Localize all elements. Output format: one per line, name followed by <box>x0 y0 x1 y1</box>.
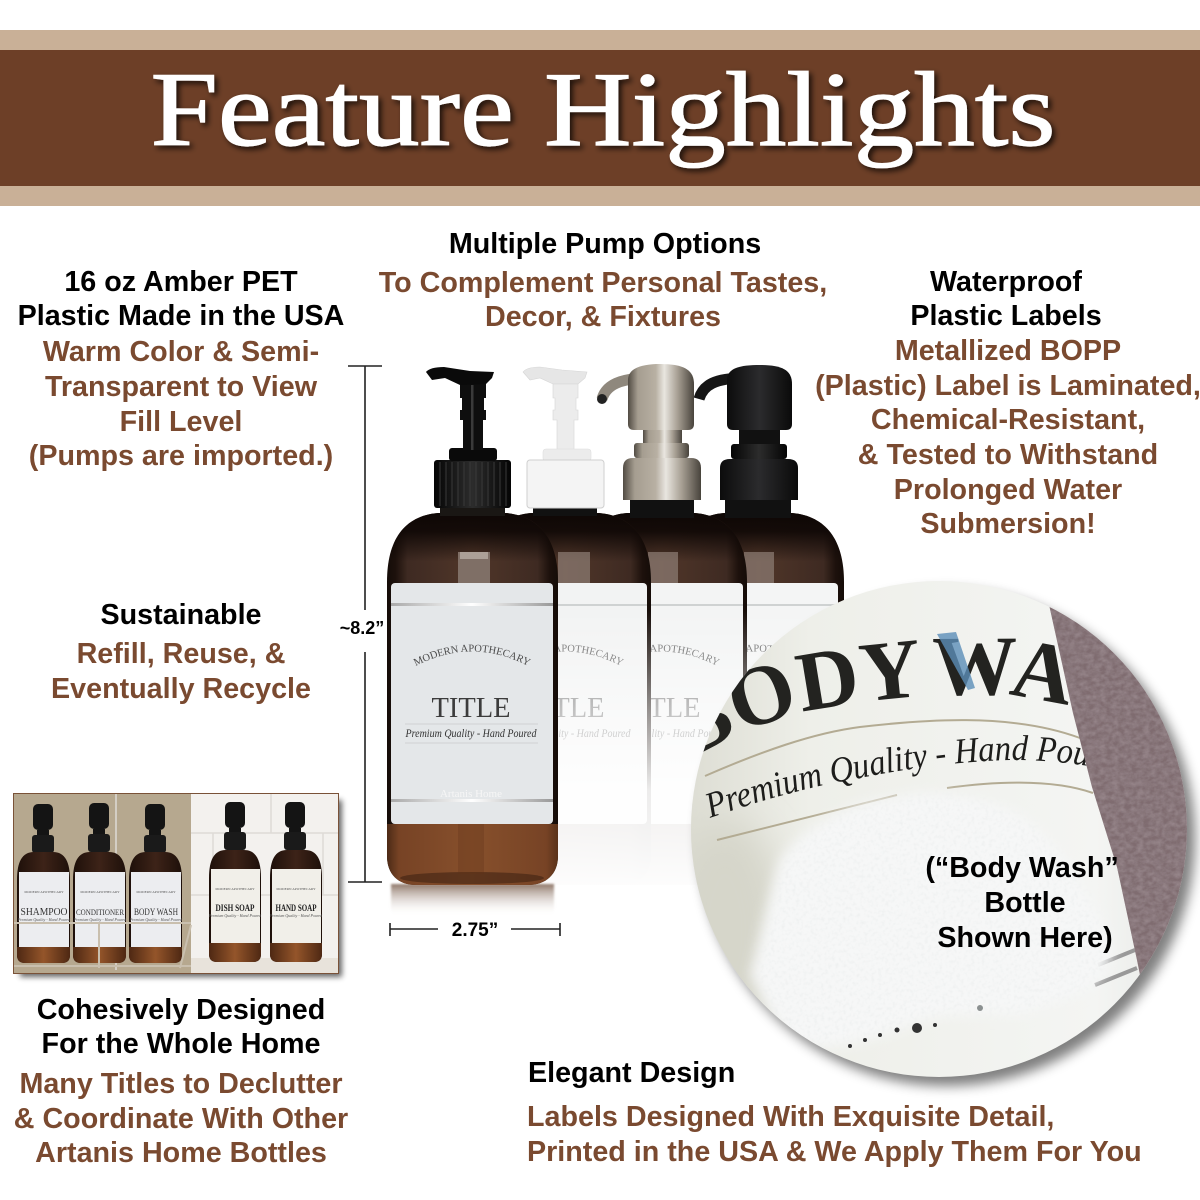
text block: amber PET: 16 oz Amber PET <box>64 266 298 298</box>
label: TITLE <box>432 692 510 724</box>
text block: waterproof labels: Waterproof <box>930 266 1082 298</box>
text block: elegant design: Printed in the USA & We Apply Them For You <box>527 1136 1142 1168</box>
text block: sustainable: Eventually Recycle <box>51 673 311 705</box>
text block: pump options: Decor, & Fixtures <box>485 301 721 333</box>
foil lines <box>705 720 1137 985</box>
bottle: white pump: Premium Quality - Hand Poured <box>499 726 631 740</box>
thumbnail bottles: SHAMPOO <box>20 907 68 918</box>
thumbnail bottles: MODERN APOTHECARY <box>136 890 176 894</box>
label <box>391 583 553 824</box>
text block: amber PET: Fill Level <box>120 406 242 438</box>
text block: cohesive design: Artanis Home Bottles <box>35 1137 327 1169</box>
lifestyle photo <box>13 793 342 977</box>
bubbles <box>848 1005 983 1048</box>
text block: amber PET: (Pumps are imported.) <box>29 440 333 472</box>
bottle: black pump, black matte: MODERN APOTHECARY <box>747 644 772 652</box>
thumbnail bottles: Premium Quality - Hand Poured <box>129 917 183 922</box>
thumbnail bottles: DISH SOAP <box>216 904 255 914</box>
main amber bottle <box>387 367 558 908</box>
caption <box>925 852 1119 954</box>
text block: waterproof labels: Metallized BOPP <box>895 335 1121 367</box>
thumbnail bottles: Premium Quality - Hand Poured <box>269 913 323 918</box>
caption: Bottle <box>984 887 1066 919</box>
text block: amber PET: Plastic Made in the USA <box>18 300 344 332</box>
text block: waterproof labels: (Plastic) Label is Laminated, <box>815 370 1200 402</box>
text block: elegant design: Labels Designed With Exquisite Detail, <box>527 1101 1054 1133</box>
fade of rear bottles <box>480 610 859 900</box>
text block: pump options: To Complement Personal Tastes, <box>379 267 827 299</box>
thumbnail bottles: Premium Quality - Hand Poured <box>73 917 127 922</box>
bottle: stainless pump: MODERN APOTHECARY <box>651 644 720 666</box>
neck and cap <box>426 367 511 516</box>
label: MODERN APOTHECARY <box>413 644 531 666</box>
caption: Shown Here) <box>937 922 1113 954</box>
text block: amber PET: Warm Color & Semi- <box>43 336 319 368</box>
wire basket <box>14 923 191 968</box>
bottle body <box>387 513 558 885</box>
text block: waterproof labels: Submersion! <box>920 508 1096 540</box>
caption: (“Body Wash” <box>925 852 1119 884</box>
thumbnail bottles: MODERN APOTHECARY <box>80 890 120 894</box>
label: Premium Quality - Hand Poured <box>405 726 537 740</box>
bottle: white pump: MODERN APOTHECARY <box>558 644 624 666</box>
height dimension <box>340 366 384 882</box>
text block: cohesive design: Cohesively Designed <box>37 994 325 1026</box>
text block: cohesive design: Many Titles to Declutter <box>19 1068 343 1100</box>
text block: amber PET: Transparent to View <box>45 371 318 403</box>
bottle: white pump <box>499 366 651 848</box>
text block: waterproof labels <box>815 266 1200 540</box>
text block: sustainable: Sustainable <box>100 599 262 631</box>
thumbnail bottles: MODERN APOTHECARY <box>24 890 64 894</box>
text block: cohesive design: & Coordinate With Other <box>14 1103 348 1135</box>
text block: cohesive design: For the Whole Home <box>42 1028 320 1060</box>
bottle: stainless pump <box>595 364 747 848</box>
text block: sustainable <box>51 599 311 705</box>
text block: pump options <box>379 228 827 333</box>
text block: elegant design <box>527 1057 1142 1168</box>
script text: Premium Quality - Hand Pou <box>706 735 1086 818</box>
blue foil glint <box>937 632 975 690</box>
towel <box>1050 607 1187 974</box>
text block: cohesive design <box>14 994 348 1169</box>
text block: waterproof labels: Chemical-Resistant, <box>871 404 1145 436</box>
text block: sustainable: Refill, Reuse, & <box>77 638 285 670</box>
reflection <box>391 884 554 916</box>
title: Feature Highlights <box>150 51 1056 168</box>
thumbnail bottles: CONDITIONER <box>76 907 124 917</box>
width dimension <box>390 920 560 941</box>
text block: amber PET <box>18 266 344 472</box>
thumbnail bottles: BODY WASH <box>134 908 178 918</box>
thumbnail bottles: HAND SOAP <box>276 904 317 914</box>
bottle: stainless pump: TITLE <box>622 692 700 724</box>
text block: elegant design: Elegant Design <box>528 1057 735 1089</box>
thumbnail bottles: MODERN APOTHECARY <box>215 887 255 891</box>
height dimension: ~8.2” <box>340 618 384 638</box>
thumbnail bottles: MODERN APOTHECARY <box>276 887 316 891</box>
thumbnail bottles: Premium Quality - Hand Poured <box>208 913 262 918</box>
text block: pump options: Multiple Pump Options <box>449 228 761 260</box>
text block: waterproof labels: Prolonged Water <box>894 474 1122 506</box>
bottle: stainless pump: Premium Quality - Hand Poured <box>595 726 727 740</box>
soap foam <box>750 793 1112 1047</box>
thumbnail bottles: Premium Quality - Hand Poured <box>17 917 71 922</box>
zoomed label detail circle <box>690 581 1200 1094</box>
bottle: black pump, black matte <box>694 365 844 660</box>
thumbnail bottles <box>17 802 323 963</box>
text block: waterproof labels: Plastic Labels <box>910 300 1102 332</box>
bottle: white pump: TITLE <box>526 692 604 724</box>
label: Artanis Home <box>440 788 502 800</box>
title banner <box>0 30 1200 206</box>
width dimension: 2.75” <box>452 920 498 941</box>
text block: waterproof labels: & Tested to Withstand <box>858 439 1158 471</box>
